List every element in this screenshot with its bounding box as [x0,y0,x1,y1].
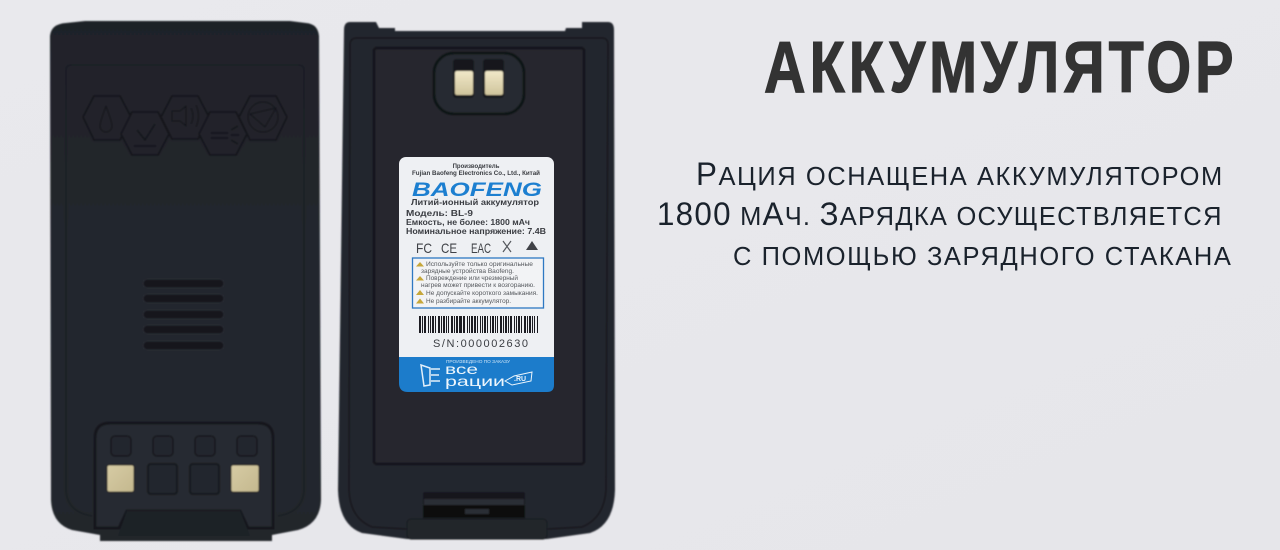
sticker: specifications [406,197,546,236]
description line 2: 1800 МАЧ. ЗАРЯДКА ОСУЩЕСТВЛЯЕТСЯ [657,196,1221,232]
sticker: certification marks [416,240,538,256]
warning text: Не допускайте короткого замыкания. [426,290,538,297]
button: drop [83,96,131,140]
sticker: manufacturer: Fujian Baofeng Electronics Co., Ltd., Китай [412,170,540,177]
warning text: Не разбирайте аккумулятор. [426,298,511,305]
footer: logo text: все [445,361,478,377]
sticker: paper [399,157,554,372]
battery back: centre pads [148,464,219,494]
footer: logo text: рации [445,373,505,389]
footer: logo text [445,361,532,389]
footer: logo text: .RU [514,376,526,383]
warning text: Используйте только оригинальные [426,261,534,268]
button: dial [239,96,287,140]
battery front: body shell [338,22,615,539]
warning text [421,261,538,305]
battery back: gold contacts [107,465,259,492]
sticker: blue footer [399,357,554,392]
sticker: certification marks: CE [441,240,457,256]
button: flashlight [199,112,247,155]
sticker: specifications: Литий-ионный аккумулятор [411,197,539,207]
battery back: bottom clip [118,511,250,536]
description text [657,156,1232,271]
battery front: terminal contacts [455,71,503,95]
sticker: specifications: Емкость, не более: 1800 мАч [406,217,530,227]
battery label sticker [399,157,554,392]
battery front: terminal wells [453,59,504,98]
battery back: contact recess [95,423,273,528]
battery back view [50,21,321,541]
sticker: manufacturer: Производитель [453,164,500,170]
footer: logo icon [421,365,440,386]
description line 1: РАЦИЯ ОСНАЩЕНА АККУМУЛЯТОРОМ [696,156,1222,192]
sticker: warning box [412,258,544,308]
warning text: зарядные устройства Baofeng. [421,268,514,275]
sticker: specifications: Модель: BL-9 [406,208,473,218]
battery front: terminal housing [434,53,524,114]
battery front view [338,22,615,539]
battery front: raised panel [374,48,584,464]
sticker: brand: BAOFENG [412,180,542,201]
description line 3: С ПОМОЩЬЮ ЗАРЯДНОГО СТАКАНА [733,243,1232,271]
sticker: manufacturer [412,164,540,177]
warning icons [416,262,424,304]
button: check mark [121,112,169,155]
battery back: mode buttons [83,96,287,155]
sticker: barcode [419,316,538,333]
button: speaker [161,96,209,139]
sticker: serial number: S/N:000002630 [433,338,528,350]
footer: order note: ПРОИЗВЕДЕНО ПО ЗАКАЗУ [446,359,510,364]
heading: АККУМУЛЯТОР [764,27,1234,107]
battery back: small keys [111,436,257,456]
battery front: frame outline [349,38,608,529]
battery back: side grooves [66,65,304,516]
battery back: body shell [50,21,321,541]
battery front: latch [407,492,547,539]
warning text: нагрев может привести к возгоранию. [421,283,535,289]
warning text: Повреждение или чрезмерный [426,275,518,282]
battery back: speaker grille [143,279,224,350]
sticker: certification marks: EAC [471,240,491,256]
sticker: specifications: Номинальное напряжение: 7.4В [406,226,546,236]
sticker: certification marks: FC [416,240,432,256]
